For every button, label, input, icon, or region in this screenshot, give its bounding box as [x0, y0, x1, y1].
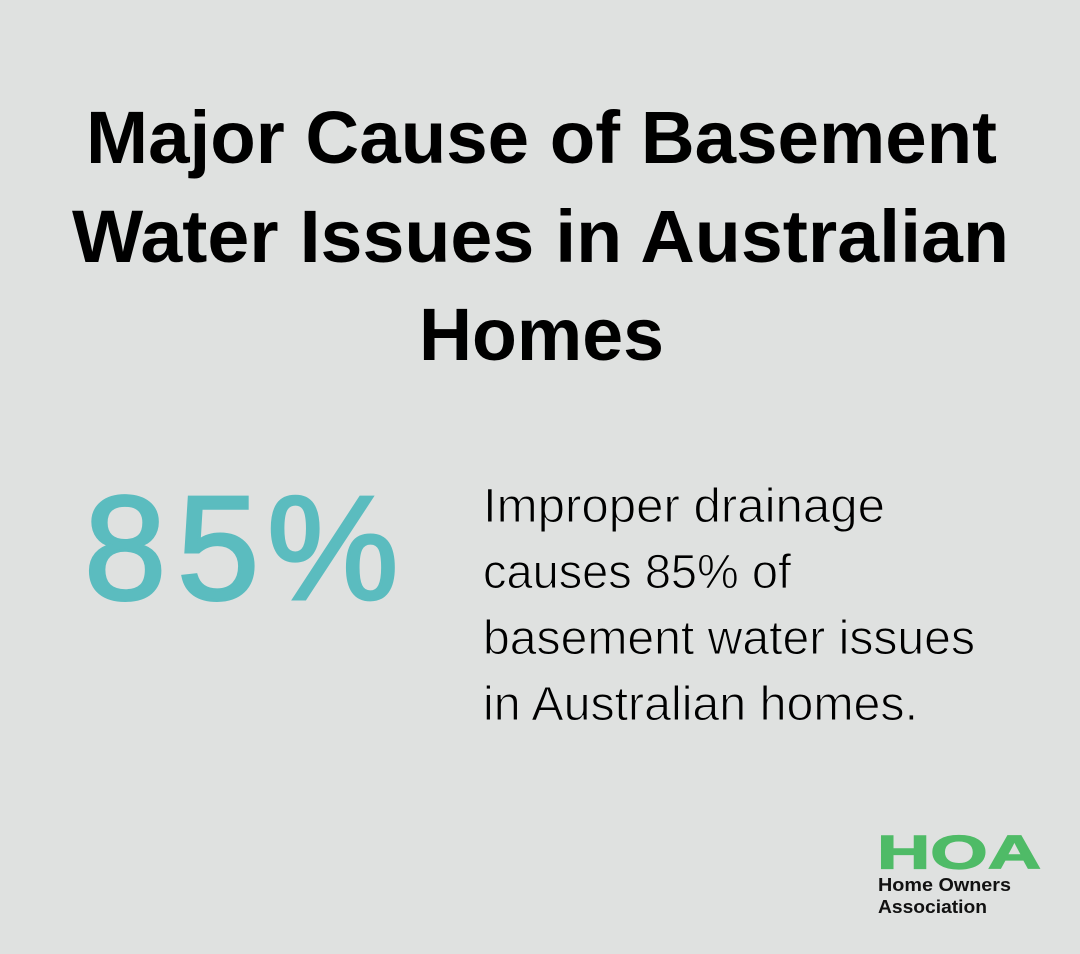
title: Water Issues in Australian — [72, 195, 1009, 278]
logo name: Home Owners — [878, 874, 1011, 895]
description text: in Australian homes. — [483, 678, 918, 731]
logo name — [878, 874, 1011, 917]
logo name: Association — [878, 896, 987, 917]
logo mark: HOA: HOA — [877, 826, 1041, 878]
title — [72, 96, 1009, 376]
description text: basement water issues — [483, 612, 975, 665]
description text: causes 85% of — [483, 546, 792, 599]
logo: Home Owners Association — [877, 826, 1041, 917]
title: Homes — [419, 293, 664, 376]
statistic: 85%: 85% — [84, 466, 399, 631]
description text — [483, 480, 975, 731]
title: Major Cause of Basement — [86, 96, 997, 179]
description text: Improper drainage — [483, 480, 885, 533]
